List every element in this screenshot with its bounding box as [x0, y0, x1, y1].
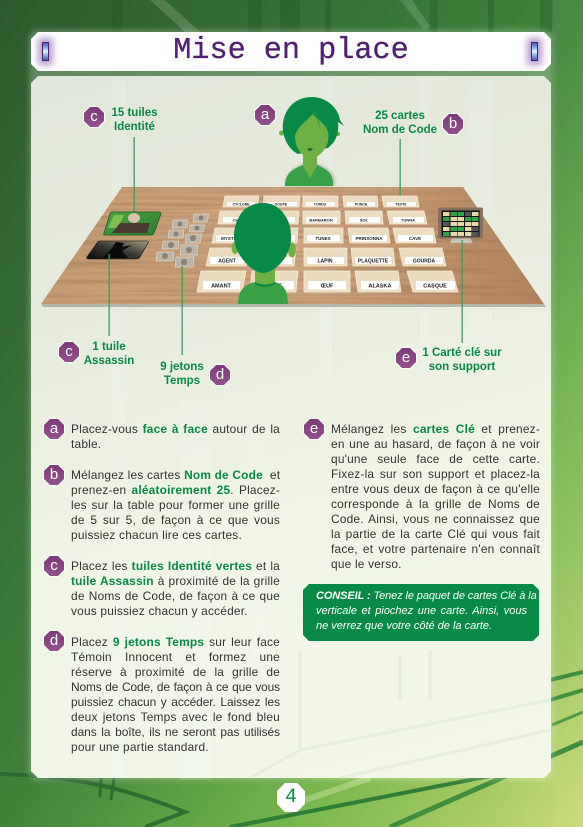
callout line: jetons	[182, 266, 183, 355]
word cards: PLAQUETTE	[358, 258, 389, 264]
step a text: Placez-vous face à face autour de la	[71, 422, 280, 436]
callout: conseil: verticale et piochez une carte. Ainsi, vous	[316, 605, 527, 617]
step e text: Mélangez les cartes Clé et prenez-	[331, 422, 540, 436]
word cards: CASQUE	[423, 284, 447, 290]
time tokens	[156, 214, 209, 267]
icon: right gem	[531, 42, 538, 61]
badge b top: b	[449, 115, 457, 132]
step d text: Placez 9 jetons Temps sur leur face	[71, 634, 280, 648]
title banner	[31, 32, 551, 71]
badge e carte clé	[395, 347, 417, 369]
word cards: ROUE	[266, 284, 282, 290]
page number: 4	[285, 786, 297, 809]
step a text	[71, 422, 280, 450]
label: 15 tuiles Identité: Identité	[114, 121, 155, 133]
badge c top: c	[90, 108, 98, 125]
step d text: puissiez chacun y accéder. Laissez les	[71, 694, 280, 708]
badge c assassin	[58, 341, 80, 363]
badge e carte clé: e	[402, 349, 410, 366]
badge a step: a	[50, 420, 58, 437]
word cards: TUNES	[315, 236, 331, 241]
label: 1 tuile Assassin: Assassin	[84, 355, 134, 367]
word cards: TUNNA	[401, 218, 415, 222]
word cards: TEXTE	[395, 202, 407, 206]
callout: conseil	[303, 584, 539, 641]
page number	[277, 783, 305, 812]
word cards: ROI	[275, 218, 283, 222]
illustration: table setup	[41, 97, 546, 355]
assassin tile	[87, 241, 148, 259]
word cards: MYSTERE	[221, 236, 243, 241]
label: 9 jetons Temps	[160, 361, 204, 387]
word cards: ALASKA	[369, 284, 391, 290]
label: 1 Carté clé sur son support: 1 Carté clé sur	[422, 347, 502, 359]
player a: partner facing us	[279, 97, 344, 186]
badge b step	[43, 464, 65, 486]
label: 15 tuiles Identité: 15 tuiles	[111, 107, 158, 119]
step d text: Témoin Innocent et formez une	[71, 650, 280, 664]
word cards: LION	[273, 236, 283, 241]
step b text: les sur la table pour former une grille	[71, 498, 280, 512]
badge a step	[43, 418, 65, 440]
token faces	[162, 216, 204, 265]
callout line: assassin	[108, 254, 110, 336]
step d text: Noms de Code, de façon à ce que vous	[71, 680, 280, 694]
label: 15 tuiles Identité	[111, 107, 158, 133]
step e text: en une au hasard, de façon à ne voir	[331, 436, 540, 450]
word cards: GOURDA	[413, 258, 435, 264]
identity tile	[104, 212, 161, 235]
step c text: Placez les tuiles Identité vertes et la	[71, 558, 280, 572]
step b text: de 5 sur 5, de façon à ce que vous	[71, 512, 280, 526]
word cards: SOUPE	[275, 202, 288, 206]
callout line: 25 cartes	[400, 139, 401, 199]
step a text: table.	[71, 436, 101, 450]
badge b step: b	[50, 466, 58, 483]
step d text	[71, 634, 280, 754]
word cards: CAVE	[409, 236, 421, 241]
step e text: la partie de la carte Clé qui vous fait	[331, 526, 540, 540]
badge a top	[254, 104, 276, 126]
badge c step: c	[50, 557, 58, 574]
label: 1 tuile Assassin	[84, 341, 134, 367]
word cards: TORDU	[314, 202, 327, 206]
word cards: AMANT	[211, 284, 232, 290]
step e text: corresponde à la grille de Noms de	[331, 496, 540, 510]
word cards: CYCLONE	[232, 202, 250, 206]
word cards: PRINSONNA	[355, 236, 383, 241]
panel: content background	[31, 76, 551, 778]
step e text: que le verso.	[331, 556, 402, 570]
badge d step: d	[50, 632, 58, 649]
word cards	[197, 196, 458, 292]
label: 25 cartes Nom de Code	[363, 110, 437, 136]
badge c assassin: c	[65, 343, 73, 360]
badge a top: a	[261, 106, 269, 123]
step e text	[331, 422, 540, 570]
callout: conseil: ne verrez que votre côté de la carte.	[316, 620, 492, 632]
step b text	[71, 468, 280, 542]
key card on its stand	[438, 208, 483, 243]
badge e step: e	[310, 420, 318, 437]
word cards: SOL	[360, 218, 369, 222]
label: 9 jetons Temps: Temps	[164, 375, 200, 387]
table	[41, 187, 546, 307]
badge c top	[83, 106, 105, 128]
step e text: Fixez-la sur son support et placez-la	[331, 466, 540, 480]
callout line: carte clé	[462, 240, 463, 343]
step c text: tuile Assassin à proximité de la grille	[71, 574, 280, 588]
step b text: puissiez chacun lire ces cartes.	[71, 528, 242, 542]
step d text: deux jetons Temps avec le fond bleu	[71, 710, 280, 724]
label: 1 Carté clé sur son support	[422, 347, 502, 373]
callout line: 15 tuiles	[134, 137, 135, 218]
badge c step	[43, 555, 65, 577]
badge e step	[303, 418, 325, 440]
heading: Mise en place	[173, 34, 409, 68]
label: 1 tuile Assassin: 1 tuile	[92, 341, 126, 353]
step c text	[71, 558, 280, 618]
word cards: ŒUF	[321, 284, 334, 290]
word cards: PONCE	[355, 202, 368, 206]
step c text: vous puissiez chacun y accéder.	[71, 604, 248, 618]
step b text: prenez-en aléatoirement 25. Placez-	[71, 482, 280, 496]
step d text: dans la boîte, ils ne seront pas utilisés	[71, 724, 280, 738]
badge b top	[442, 113, 464, 135]
label: 1 Carté clé sur son support: son support	[429, 361, 495, 373]
icon: left gem	[42, 42, 49, 61]
callout: conseil: CONSEIL : Tenez le paquet de cartes Clé à la	[316, 590, 537, 602]
label: 25 cartes Nom de Code: 25 cartes	[375, 110, 425, 122]
word cards: BARBARON	[309, 218, 333, 222]
player b: seen from behind	[232, 203, 296, 304]
word cards: AGENT	[218, 258, 236, 264]
step e text: entre vous deux de façon à ce qu'elle	[331, 482, 540, 496]
step d text: pour une partie standard.	[71, 740, 209, 754]
badge d jetons: d	[216, 366, 224, 383]
word cards: BANC	[267, 258, 282, 264]
step b text: Mélangez les cartes Nom de Code et	[71, 468, 280, 482]
step e text: face, et votre partenaire n'en connaît	[331, 542, 540, 556]
label: 25 cartes Nom de Code: Nom de Code	[363, 124, 437, 136]
badge d jetons	[209, 364, 231, 386]
step c text: de Noms de Code, de façon à ce que	[71, 588, 280, 602]
badge d step	[43, 630, 65, 652]
step d text: réserve à proximité de la grille de	[71, 664, 280, 678]
step e text: Code. Ainsi, vous ne connaissez que	[331, 512, 540, 526]
word cards: LAPIN	[318, 258, 333, 264]
step e text: qu'une seule face de cette carte.	[331, 452, 540, 466]
label: 9 jetons Temps: 9 jetons	[160, 361, 204, 373]
word cards: CHAT	[233, 218, 244, 222]
